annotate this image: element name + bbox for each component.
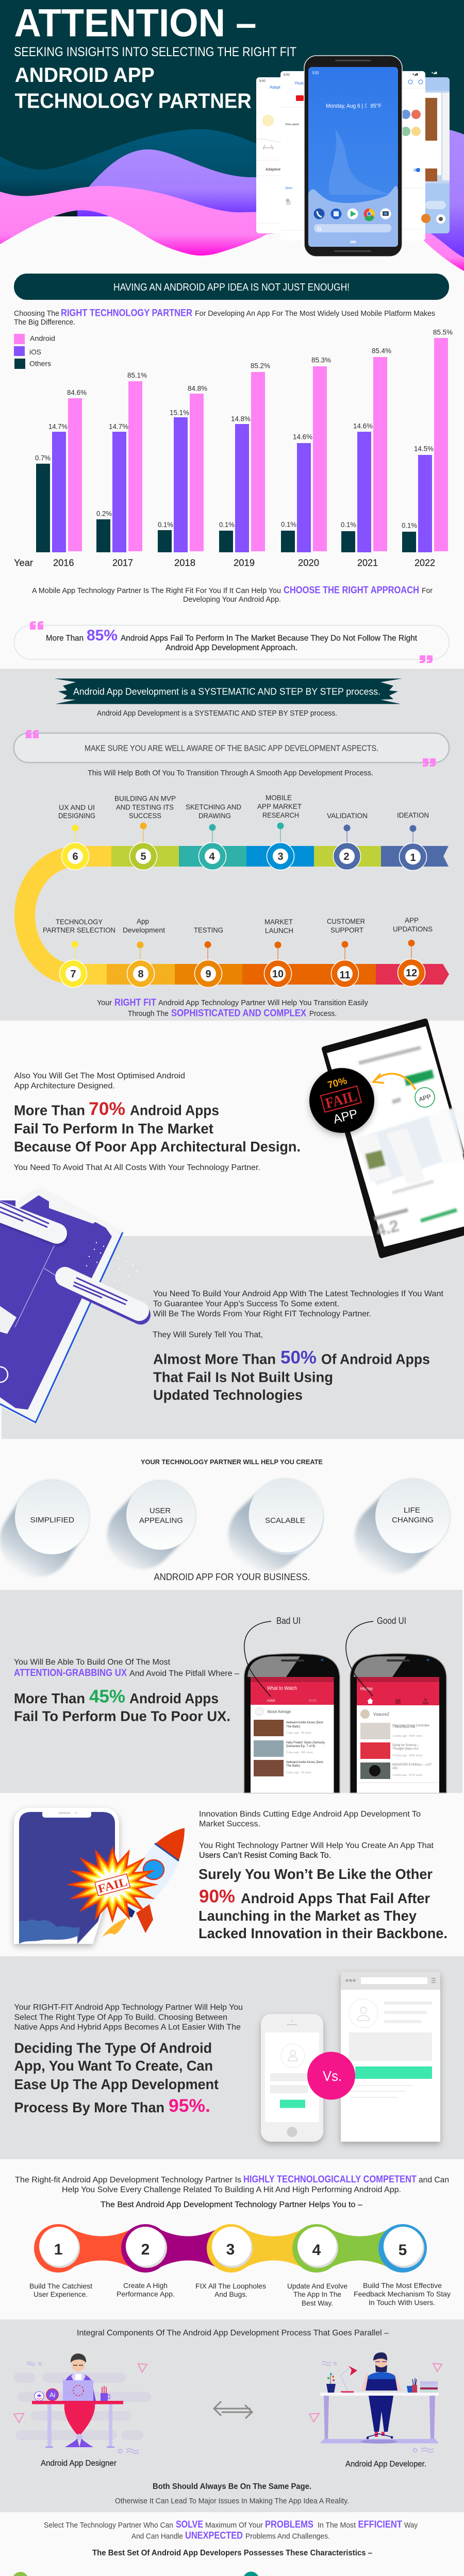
heading: YOUR TECHNOLOGY PARTNER WILL HELP YOU CREATE (141, 1458, 323, 1466)
text block: ux (14, 1658, 239, 1724)
step labels: App (137, 917, 149, 925)
panel: app type (0, 1956, 464, 2159)
disc: user appealing: USER (150, 1506, 171, 1515)
text block: competent: The Best Android App Development Technology Partner Helps You to – (101, 2200, 362, 2209)
curve connector (25, 856, 111, 974)
step labels: RESEARCH (262, 811, 299, 819)
chain: five help steps (34, 2224, 427, 2273)
roadmap: 12 steps: 4 (209, 851, 215, 862)
text block: solve problems: The Best Set Of Android App Developers Possesses These Characteristics – (92, 2549, 372, 2557)
text block: choosing the right technology partner: For Developing An App For The Most Widely Used Mobile Platform Makes (195, 309, 435, 318)
heading: android app technology partner: ANDROID APP (15, 64, 155, 87)
badge: 70 percent fail app: APP (332, 1107, 359, 1127)
text: right fit transition: Through The (128, 1009, 169, 1018)
text block: native vs hybrid: Select The Right Type Of App To Build. Choosing Between (14, 2013, 227, 2022)
callout: 85 percent: Android App Development Approach. (165, 643, 297, 652)
phone: good ui: MONSTER EYEBALL – LÜT (392, 1763, 432, 1767)
step labels: TECHNOLOGY (56, 918, 103, 926)
text block: latest technologies: Almost More Than (153, 1351, 276, 1367)
disc: scalable: SCALABLE (265, 1516, 305, 1525)
value labels: 85.5% (433, 328, 453, 336)
step labels: UX AND UI (59, 803, 95, 811)
step labels: UPDATIONS (393, 925, 433, 933)
illustration: app developer (309, 2352, 442, 2452)
text: same page: Both Should Always Be On The Same Page. (153, 2482, 311, 2491)
text block: solve problems: UNEXPECTED (185, 2531, 243, 2541)
year axis (14, 558, 435, 568)
text block: choose the right approach: For (422, 586, 433, 595)
callout: 85 percent: More Than (46, 634, 84, 642)
roadmap: 12 steps: 2 (343, 851, 350, 862)
year axis: 2018 (174, 558, 195, 568)
text block: solve problems: Way (404, 2521, 418, 2530)
phone: bad ui: 2 days ago · 3K views (286, 1771, 311, 1774)
text block: architecture: 70% (89, 1099, 125, 1119)
year axis: 2021 (357, 558, 378, 568)
text: process subtitle: Android App Development is a SYSTEMATIC AND STEP BY STEP process. (97, 709, 337, 718)
roadmap: 12 steps: 5 (140, 851, 146, 862)
banner: having an idea is not enough: HAVING AN ANDROID APP IDEA IS NOT JUST ENOUGH! (113, 282, 350, 293)
text block: latest technologies: They Will Surely Tell You That, (153, 1330, 263, 1339)
text block: solve problems: EFFICIENT (358, 2519, 402, 2530)
text block: latest technologies: That Fail Is Not Built Using (153, 1369, 333, 1385)
roadmap: 12 steps: 7 (70, 969, 76, 980)
step captions: And Bugs. (214, 2290, 247, 2298)
text block: solve problems (44, 2519, 418, 2557)
decorative dots (86, 1242, 138, 1289)
text block: innovation: Users Can’t Resist Coming Back To. (199, 1851, 331, 1860)
chain: five help steps: 2 (141, 2241, 150, 2258)
value labels: 84.6% (67, 388, 87, 397)
text block: innovation: 90% (199, 1887, 235, 1907)
step captions: In Touch With Users. (369, 2298, 435, 2307)
value labels: 0.7% (35, 453, 51, 462)
value labels: 0.1% (219, 520, 235, 529)
legend: Others (29, 360, 51, 368)
labels: bad and good ui: Bad UI (276, 1616, 301, 1626)
panel: systematic process (0, 669, 464, 1021)
step captions: Best Way. (302, 2299, 333, 2307)
arrow: good ui curve (346, 1621, 373, 1696)
value labels: 85.2% (251, 361, 270, 369)
step labels: LAUNCH (265, 926, 293, 935)
step labels: DESIGNING (58, 811, 95, 820)
icon: android phones fan: 9:00 (259, 80, 266, 83)
labels: bad and good ui (276, 1616, 406, 1626)
text block: native vs hybrid: Ease Up The App Development (14, 2076, 219, 2092)
icon: android phones fan: Semi (285, 187, 292, 190)
text block: latest technologies: You Need To Build Your Android App With The Latest Technologies If You Want (153, 1290, 444, 1298)
legend: Android (30, 334, 55, 342)
text block: solve problems: In The Most (318, 2521, 356, 2530)
text block: innovation: Android Apps That Fail After (241, 1890, 430, 1906)
step labels: BUILDING AN MVP (114, 794, 176, 803)
phone: good ui: Dying for Science – (392, 1744, 420, 1747)
panel: innovation (14, 1808, 448, 1944)
text block: latest technologies (153, 1290, 444, 1403)
phone: good ui: Vsauce2 (373, 1712, 390, 1717)
roadmap: 12 steps: 11 (339, 970, 351, 981)
text block: competent: HIGHLY TECHNOLOGICALLY COMPETENT (243, 2174, 417, 2185)
badge: vs (307, 2052, 355, 2100)
text: right fit transition: Your (97, 998, 112, 1007)
value labels: 0.1% (158, 520, 173, 529)
year axis: 2022 (415, 558, 435, 568)
text block: architecture: Because Of Poor App Architectural Design. (14, 1139, 301, 1155)
value labels: 0.2% (96, 510, 112, 518)
disc: simplified (15, 1480, 89, 1554)
text block: architecture: Fail To Perform In The Market (14, 1121, 213, 1137)
text block: latest technologies: 50% (280, 1348, 317, 1368)
card 2 (243, 2572, 449, 2576)
text block: solve problems: PROBLEMS (265, 2519, 313, 2530)
step labels: DRAWING (198, 811, 231, 820)
value labels: 14.6% (293, 433, 312, 441)
icon: mobile phone (261, 2014, 323, 2142)
step captions (29, 2281, 451, 2307)
value labels (35, 328, 453, 530)
text block: choose the right approach (32, 585, 433, 604)
phone: bad ui: 3 days ago · 48K views (286, 1751, 313, 1754)
icon: tilted phone with fail badge (309, 1021, 464, 1256)
text block: competent: and Can (419, 2176, 449, 2184)
step labels: CUSTOMER (327, 917, 365, 925)
icon: android phones fan: Time spent (285, 123, 299, 126)
arrows: parallel process (214, 2401, 252, 2418)
panel: app architecture (0, 1021, 464, 1439)
phone: bad ui: MUSIC (309, 1700, 318, 1703)
step labels: SUPPORT (330, 926, 363, 934)
step labels: TESTING (194, 926, 223, 934)
text block: ux: Android Apps (129, 1690, 219, 1706)
ribbon heading: Android App Development is a SYSTEMATIC AND STEP BY STEP process. (73, 686, 380, 697)
text block: architecture: Also You Will Get The Most Optimised Android (14, 1072, 185, 1080)
text: same page: Otherwise It Can Lead To Major Issues In Making The App Idea A Reality. (115, 2497, 349, 2505)
year axis: 2016 (53, 558, 74, 568)
illustration: app designer (14, 2353, 151, 2453)
text block: architecture: You Need To Avoid That At All Costs With Your Technology Partner. (13, 1163, 260, 1172)
bottom track (107, 964, 449, 985)
arrow: app to fail (373, 1074, 416, 1090)
text block: native vs hybrid (14, 2003, 243, 2116)
step captions: Build The Most Effective (363, 2281, 442, 2290)
phone: bad ui: 2 days ago · 3K views (286, 1732, 311, 1735)
text block: choose the right approach: CHOOSE THE RIGHT APPROACH (284, 585, 419, 596)
icon: android phones fan: 9:00 (284, 74, 290, 77)
roadmap: 12 steps: 10 (272, 969, 284, 980)
phone: bad ui: HOME (267, 1700, 275, 1703)
disc: life changing: LIFE (404, 1506, 420, 1515)
text block: solve problems: Select The Technology Partner Who Can (44, 2521, 173, 2530)
icon: android phones fan: ▾◢▮ (412, 73, 418, 76)
step captions: User Experience. (34, 2290, 88, 2298)
phone: good ui: #53 (392, 1767, 398, 1770)
phone: bad ui: The Balls) (286, 1725, 300, 1728)
banner: having an idea is not enough (14, 274, 449, 300)
text block: solve problems: Maximum Of Your (205, 2521, 263, 2530)
text block: native vs hybrid: Process By More Than (14, 2099, 164, 2115)
step labels: Development (123, 926, 165, 934)
badge: vs: Vs. (323, 2068, 342, 2084)
text block: ux: Fail To Perform Due To Poor UX. (14, 1708, 230, 1724)
phone: good ui: Home (360, 1686, 373, 1692)
roadmap: 12 steps: 1 (410, 852, 416, 863)
icon: app ring: APP (418, 1093, 432, 1103)
step captions: Build The Catchiest (29, 2282, 92, 2290)
callout: basic aspects: MAKE SURE YOU ARE WELL AWARE OF THE BASIC APP DEVELOPMENT ASPECTS. (85, 744, 378, 753)
phone: bad ui (244, 1654, 340, 1793)
value labels: 85.1% (127, 371, 147, 379)
card: lower (65, 1277, 141, 1315)
phone: good ui: 3 weeks ago · 817K views (392, 1774, 423, 1777)
illustration: app designer: Ai (49, 2391, 55, 2399)
value labels: 0.1% (341, 520, 356, 529)
icon: fail burst (66, 1846, 159, 1923)
icon: android phones fan: Adapt (270, 85, 281, 90)
step labels: IDEATION (397, 811, 429, 819)
text: right fit transition: Android App Technology Partner Will Help You Transition Easily (158, 998, 368, 1007)
text block: innovation (198, 1810, 448, 1941)
text: right fit transition (97, 997, 368, 1019)
text block: solve problems: And Can Handle (131, 2532, 183, 2541)
disc: simplified: SIMPLIFIED (30, 1516, 74, 1524)
heading: android app technology partner: TECHNOLOGY PARTNER (15, 89, 252, 112)
disc: life changing: CHANGING (392, 1516, 434, 1524)
heading: attention: ATTENTION – (14, 1, 257, 45)
step labels: SKETCHING AND (186, 803, 241, 811)
icon: android phones fan: Adaptive (266, 167, 280, 172)
icon: tilted purple phone (0, 1188, 141, 1425)
text block: innovation: Innovation Binds Cutting Edge Android App Development To (199, 1810, 421, 1819)
step labels: VALIDATION (327, 811, 368, 820)
step labels: APP MARKET (257, 802, 302, 810)
year axis: Year (14, 558, 33, 568)
text block: architecture (13, 1072, 301, 1172)
badge: 70 percent fail app: FAIL (324, 1088, 359, 1112)
text block: ux: ATTENTION-GRABBING UX (14, 1668, 127, 1679)
text block: ux: More Than (14, 1690, 85, 1706)
step markers and pins (71, 822, 417, 960)
subheading: SEEKING INSIGHTS INTO SELECTING THE RIGHT FIT (14, 45, 296, 59)
phone: good ui: Wearable Mood Controller (392, 1724, 429, 1727)
text block: innovation: You Right Technology Partner Will Help You Create An App That (199, 1841, 434, 1850)
text block: ux: 45% (89, 1687, 125, 1707)
step labels: PARTNER SELECTION (43, 926, 115, 934)
text block: latest technologies: To Guarantee Your App’s Success To Some extent. (153, 1300, 339, 1309)
chain: five help steps: 5 (399, 2242, 407, 2259)
text block: innovation: Market Success. (199, 1820, 260, 1828)
icon: android phones fan: Youtu (294, 81, 305, 86)
disc: scalable (248, 1478, 324, 1555)
value labels: 14.8% (231, 414, 251, 422)
labels: designer and developer: Android App Developer. (345, 2460, 426, 2468)
text: right fit transition: SOPHISTICATED AND COMPLEX (171, 1008, 306, 1019)
step labels: AND TESTING ITS (116, 803, 174, 811)
icon: android phones fan: ▾◢▮ (432, 72, 437, 75)
text block: latest technologies: Will Be The Words From Your Right FIT Technology Partner. (153, 1310, 371, 1318)
legend (14, 334, 55, 369)
text block: innovation: Launching in the Market as They (198, 1908, 417, 1924)
icon: tilted phone with fail badge: 4.2 (374, 1216, 401, 1240)
step captions: Create A High (123, 2281, 168, 2290)
icon: android phones fan: 9:00 (312, 71, 319, 75)
step captions: Feedback Mechanism To Stay (354, 2290, 451, 2298)
text block: choose the right approach: A Mobile App Technology Partner Is The Right Fit For You If It Can Help You (32, 586, 281, 595)
icon: android phones fan (256, 56, 450, 257)
callout: 85 percent (14, 621, 449, 663)
phone: good ui: – Mind Blow #96 (392, 1726, 416, 1729)
value labels: 0.1% (281, 520, 296, 529)
phone: good ui (350, 1654, 446, 1793)
text: right fit transition: RIGHT FIT (114, 997, 156, 1008)
text block: architecture: More Than (14, 1103, 85, 1118)
text: smooth process: This Will Help Both Of You To Transition Through A Smooth App Development Process. (88, 769, 373, 777)
value labels: 14.5% (414, 444, 434, 452)
chain: five help steps: 4 (312, 2242, 321, 2259)
value labels: 0.1% (402, 521, 417, 530)
disc: user appealing: APPEALING (139, 1516, 183, 1525)
icon: app ring (415, 1088, 435, 1107)
disc: life changing (375, 1479, 450, 1553)
callout: 85 percent: Android Apps Fail To Perform In The Market Because They Do Not Follow The Right (121, 634, 418, 642)
step captions: FIX All The Loopholes (195, 2282, 266, 2290)
phone: bad ui: Hairy Freakin’ Styles (Seriously (286, 1741, 325, 1744)
labels: designer and developer (41, 2459, 426, 2468)
value labels: 85.4% (372, 346, 391, 354)
callout: 85 percent: 85% (87, 627, 118, 644)
text block: latest technologies: Of Android Apps (321, 1351, 430, 1367)
roadmap: 12 steps: 9 (205, 969, 211, 980)
value labels: 14.6% (353, 421, 373, 430)
legend: iOS (29, 348, 41, 356)
phone: bad ui: Above Average (267, 1709, 291, 1714)
step labels: SUCCESS (129, 811, 161, 820)
roadmap: 12 steps: 12 (406, 968, 417, 979)
text block: architecture: Android Apps (130, 1103, 219, 1118)
text block: innovation: Surely You Won’t Be Like the Other (198, 1866, 433, 1882)
step captions: Update And Evolve (287, 2282, 347, 2290)
text block: ux: And Avoid The Pitfall Where – (129, 1669, 239, 1678)
text block: native vs hybrid: Deciding The Type Of Android (14, 2040, 212, 2056)
year axis: 2017 (112, 558, 133, 568)
chart: market share by year (14, 328, 453, 568)
roadmap: 12 steps: 8 (138, 969, 144, 980)
step labels (43, 793, 433, 935)
ribbon heading (54, 679, 402, 704)
panel: ux comparison (0, 1590, 462, 1793)
card: top (0, 1202, 58, 1236)
step labels: MOBILE (266, 793, 292, 802)
chain: five help steps: 3 (226, 2241, 235, 2258)
text: same page (115, 2482, 349, 2505)
value labels: 14.7% (48, 422, 68, 430)
callout: basic aspects (14, 730, 449, 767)
text block: solve problems: SOLVE (176, 2519, 203, 2530)
phone: good ui: 2 weeks ago · 480K views (392, 1754, 423, 1757)
step captions: The App In The (293, 2290, 341, 2298)
text block: choose the right approach: Developing Your Android App. (183, 595, 281, 604)
year axis: 2020 (298, 558, 319, 568)
icon: android phones fan: G (317, 226, 322, 232)
phone: bad ui: Awkward Auntie Kisses (Deck (286, 1721, 324, 1724)
step labels: APP (405, 916, 419, 924)
text block: ux: You Will Be Able To Build One Of The Most (14, 1658, 171, 1667)
icon: browser window (341, 1972, 440, 2142)
value labels: 84.8% (188, 384, 207, 393)
bars: ios (52, 417, 432, 552)
panel: hero (0, 0, 464, 271)
icon: phone and failed rocket: FAIL (96, 1875, 129, 1895)
badge: 70 percent fail app (309, 1068, 374, 1133)
phone: bad ui: What to Watch (267, 1686, 297, 1691)
phone: good ui: Thought Glass #12 (392, 1748, 419, 1751)
text block: choosing the right technology partner: The Big Difference. (14, 318, 75, 327)
text block: choosing the right technology partner (14, 308, 435, 327)
text block: choosing the right technology partner: RIGHT TECHNOLOGY PARTNER (61, 308, 192, 318)
phone: bad ui: Awkward Auntie Kisses (Deck (286, 1761, 324, 1764)
text block: latest technologies: Updated Technologies (153, 1387, 303, 1403)
value labels: 15.1% (170, 408, 189, 416)
top track (111, 846, 449, 867)
panel: competent partner (15, 2174, 451, 2307)
roadmap: 12 steps (25, 793, 449, 987)
text block: native vs hybrid: 95%. (169, 2096, 210, 2116)
text: right fit transition: Process. (309, 1009, 337, 1018)
text block: innovation: Lacked Innovation in their Backbone. (198, 1925, 448, 1941)
text block: competent (15, 2174, 449, 2209)
phone: bad ui: The Balls) (286, 1765, 300, 1768)
chain: five help steps: 1 (54, 2241, 62, 2258)
bars: others (36, 464, 416, 552)
panel: what partner helps create (15, 1458, 450, 1582)
arrow: bad ui curve (244, 1621, 271, 1697)
text block: choosing the right technology partner: Choosing The (14, 309, 59, 318)
phone: bad ui: Distracted Ep. 7 of 8) (286, 1745, 315, 1748)
text block: native vs hybrid: App, You Want To Create, Can (14, 2058, 213, 2074)
labels: designer and developer: Android App Designer (41, 2459, 117, 2468)
value labels: 14.7% (109, 422, 128, 430)
text block: native vs hybrid: Your RIGHT-FIT Android App Technology Partner Will Help You (14, 2003, 243, 2012)
text block: competent: Help You Solve Every Challenge Related To Building A Hit And High Performing Android App. (62, 2185, 401, 2194)
badge: 70 percent fail app: 70% (326, 1075, 349, 1091)
panel: developer characteristics (12, 2519, 449, 2576)
icon: phone and failed rocket (14, 1808, 185, 1944)
panel: designer and developer (0, 2319, 464, 2512)
value labels: 85.3% (311, 355, 331, 364)
text block: native vs hybrid: Native Apps And Hybrid Apps Becomes A Lot Easier With The (14, 2023, 241, 2032)
text block: architecture: App Architecture Designed. (14, 1082, 115, 1091)
bars: android (68, 338, 448, 551)
step labels: MARKET (264, 918, 293, 926)
card 1 (12, 2572, 218, 2576)
phone: good ui: 2 weeks ago · 664K views (392, 1735, 423, 1738)
heading: android app technology partner (15, 64, 252, 112)
caption: ANDROID APP FOR YOUR BUSINESS. (154, 1572, 310, 1582)
icon: android phones fan: Monday, Aug 6 | ☾ 85°F (326, 103, 382, 109)
labels: bad and good ui: Good UI (377, 1616, 406, 1626)
heading: Integral Components Of The Android App Development Process That Goes Parallel – (77, 2329, 389, 2337)
text block: competent: The Right-fit Android App Development Technology Partner Is (15, 2176, 241, 2184)
roadmap: 12 steps: 6 (72, 851, 78, 862)
year axis: 2019 (234, 558, 255, 568)
roadmap: 12 steps: 3 (277, 851, 284, 862)
text block: solve problems: Problems And Challenges. (245, 2532, 330, 2541)
disc: user appealing (126, 1481, 195, 1550)
step captions: Performance App. (117, 2290, 175, 2298)
